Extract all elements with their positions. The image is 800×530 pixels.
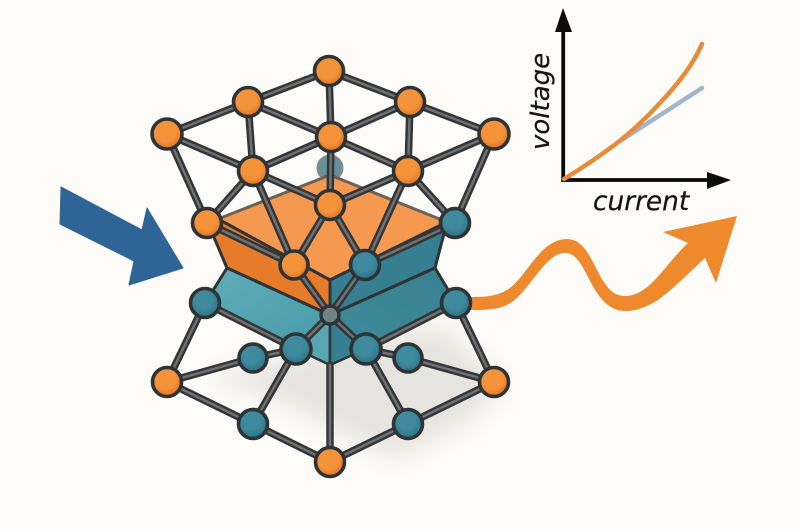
lattice structure [205,156,456,365]
bottom left small facet [296,315,330,365]
lattice bonds [167,71,494,462]
y-axis label: voltage [526,53,556,150]
blue input arrow [60,187,183,285]
x-axis label: current [593,186,691,217]
central grey node [321,306,339,324]
floor shadow [205,325,505,460]
nonlinear orange curve [564,44,702,179]
orange side face [213,219,330,315]
teal lattice nodes [190,208,470,438]
line chart: voltage vs current [526,8,731,217]
lower left teal face [205,268,330,349]
orange wavy output arrow [470,216,737,311]
upper orange top face [218,175,447,280]
orange lattice nodes [152,56,509,476]
chart axes [555,8,731,189]
ghost back node [318,156,342,180]
bottom right small facet [330,315,366,365]
linear reference curve [617,88,702,143]
lower right teal face [330,268,456,349]
upper teal side face [330,222,447,315]
